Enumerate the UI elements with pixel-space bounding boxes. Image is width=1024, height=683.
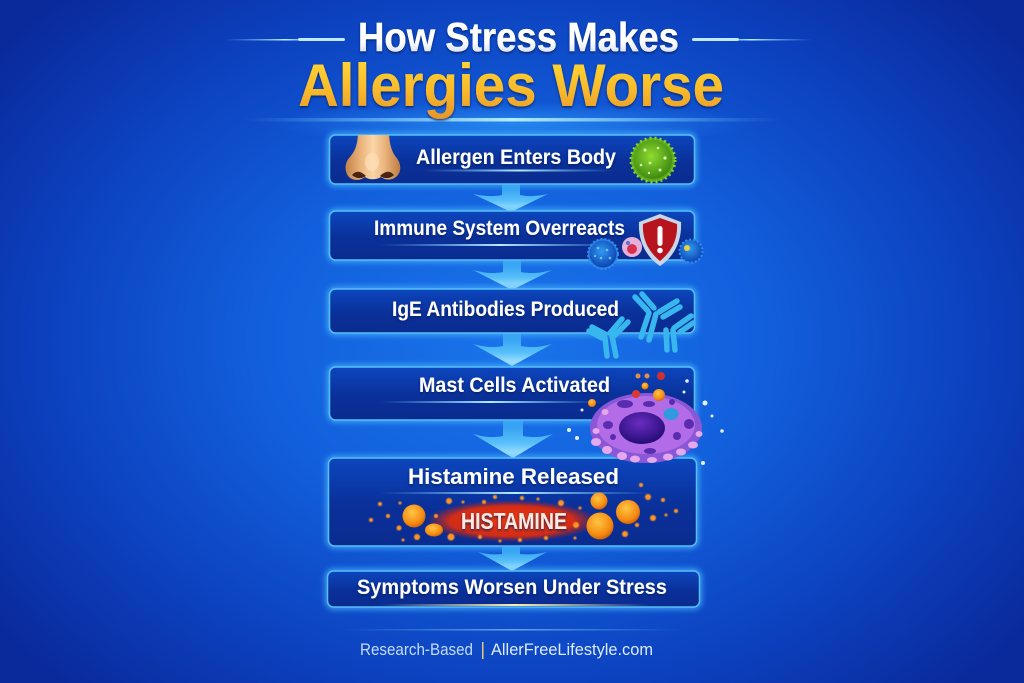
title line one: How Stress Makes — [358, 14, 679, 60]
icon: allergen virus — [631, 138, 675, 182]
released granules — [588, 372, 665, 407]
antibody right — [666, 316, 693, 350]
step 2: immune system overreacts — [330, 211, 702, 269]
footer source: Research-Based — [360, 641, 473, 659]
histamine label: HISTAMINE — [461, 508, 567, 534]
step 5 heading: Histamine Released — [408, 464, 619, 489]
arrow 2 — [473, 260, 552, 290]
step 5 divider — [380, 492, 650, 494]
icon: shield — [639, 214, 681, 266]
step 4 panel — [330, 367, 694, 420]
step 2 heading: Immune System Overreacts — [374, 217, 625, 240]
arrow 4 — [473, 421, 553, 458]
title accent line right — [692, 38, 812, 41]
step 5: histamine released — [328, 458, 696, 546]
step 1 divider — [424, 170, 614, 172]
step 4 divider — [380, 401, 600, 403]
arrow 1 — [473, 184, 548, 212]
icon: immune cell right — [680, 240, 702, 262]
title line two: Allergies Worse — [298, 52, 724, 119]
sparks — [369, 483, 678, 542]
step 2 divider — [380, 244, 620, 246]
step 1 panel — [330, 135, 694, 184]
step 4 heading: Mast Cells Activated — [419, 374, 610, 397]
histamine orbs — [402, 492, 640, 540]
antibody left — [589, 319, 628, 356]
step 1 heading: Allergen Enters Body — [416, 146, 616, 169]
title — [225, 14, 812, 146]
footer website: AllerFreeLifestyle.com — [491, 641, 653, 659]
antibody large — [635, 294, 680, 340]
icon: immune cell left — [588, 239, 618, 269]
step 6 gold divider — [380, 604, 650, 606]
histamine burst — [369, 483, 678, 542]
footer — [360, 641, 653, 659]
icon: nose — [346, 135, 400, 180]
flow arrows — [473, 184, 553, 571]
step 4: mast cells activated — [330, 367, 724, 465]
footer rule — [340, 629, 685, 630]
icon: antibodies — [589, 294, 693, 356]
step 3 heading: IgE Antibodies Produced — [392, 298, 619, 321]
icon: mast cell — [567, 372, 724, 465]
step 6: symptoms worsen under stress — [328, 571, 700, 607]
step 1: allergen enters body — [330, 135, 694, 184]
step 2 panel — [330, 211, 694, 260]
title accent line left — [225, 38, 345, 41]
step 3 panel — [330, 289, 694, 333]
step 3: ige antibodies produced — [330, 289, 694, 356]
sparkles — [567, 379, 724, 465]
step 6 panel — [328, 571, 700, 607]
step 6 heading: Symptoms Worsen Under Stress — [357, 575, 667, 599]
red glow — [426, 500, 598, 542]
arrow 5 — [478, 547, 547, 571]
icon: pink cell — [622, 237, 642, 257]
footer separator — [482, 642, 484, 659]
title underline — [245, 102, 780, 146]
step 5 panel — [328, 458, 696, 546]
arrow 3 — [473, 333, 552, 366]
